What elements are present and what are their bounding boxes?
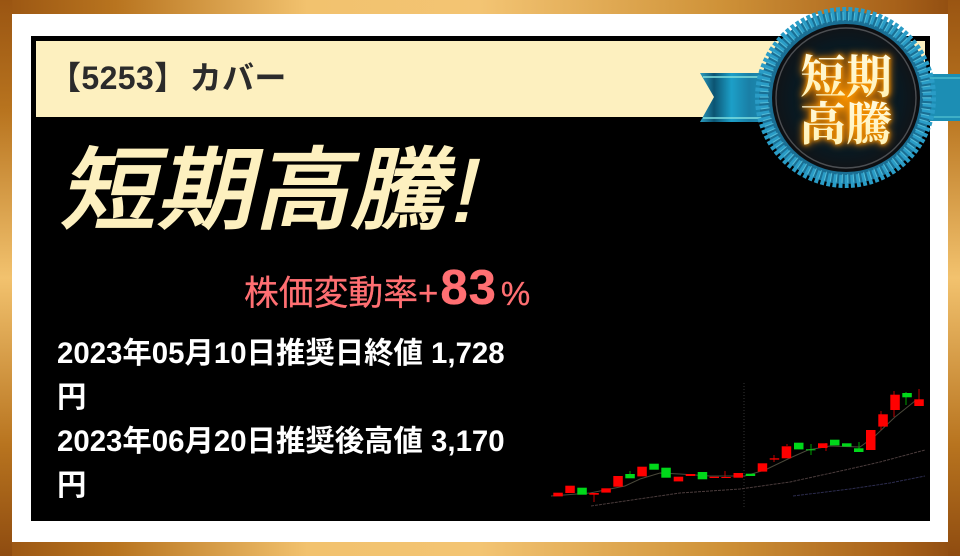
badge text: 高騰 xyxy=(800,88,892,154)
recommended date close: 2023年05月10日推奨日終値 1,728 xyxy=(57,337,505,370)
price change rate: 株価変動率+83% xyxy=(244,261,530,315)
yen unit 1: 円 xyxy=(57,381,86,414)
right ribbon tail xyxy=(920,74,960,121)
header band xyxy=(36,41,925,117)
rosette edge xyxy=(759,11,932,184)
candlestick chart xyxy=(551,383,925,507)
header title: 【5253】カバー xyxy=(49,60,287,96)
left ribbon tail xyxy=(700,73,770,122)
main heading: 短期高騰! xyxy=(54,140,493,241)
yen unit 2: 円 xyxy=(57,469,86,502)
badge text xyxy=(800,41,892,154)
badge disc xyxy=(772,24,920,172)
ribbon badge xyxy=(700,7,960,188)
post-recommendation high: 2023年06月20日推奨後高値 3,170 xyxy=(57,425,505,458)
badge text: 短期 xyxy=(800,41,892,107)
